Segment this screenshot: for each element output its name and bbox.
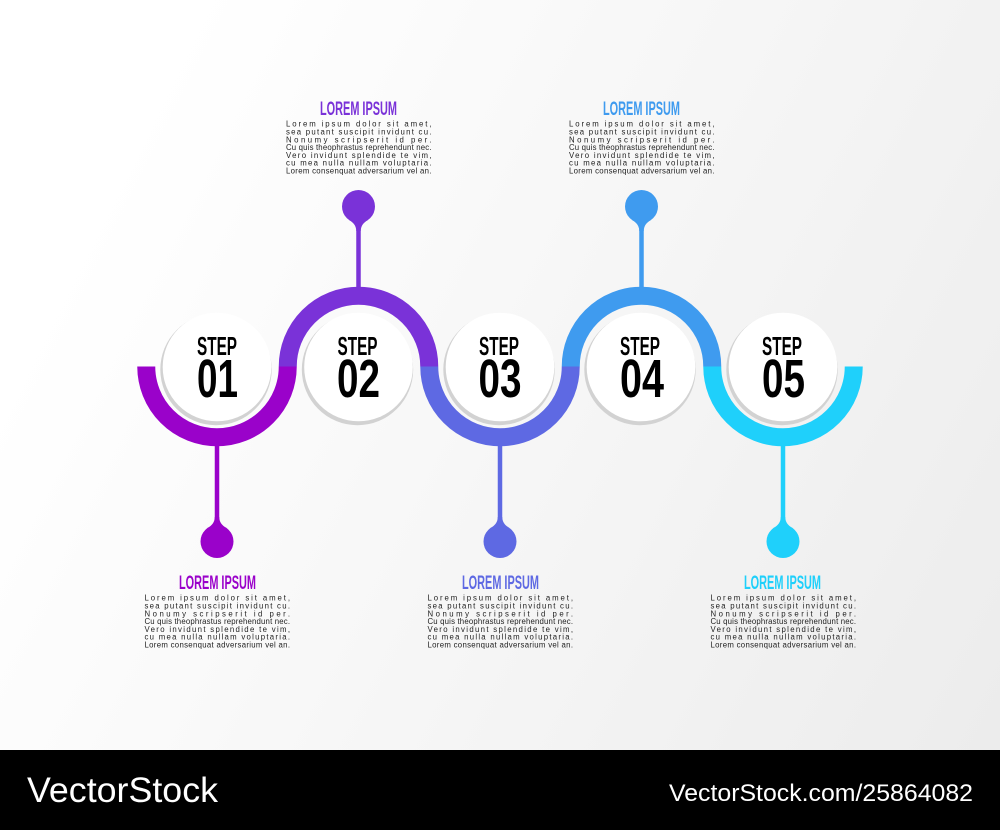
text block: step 5: Lorem ipsum dolor sit amet, — [710, 594, 856, 603]
text block: step 3: cu mea nulla nullam voluptaria. — [428, 633, 573, 642]
text block: step 4: Cu quis theophrastus reprehendunt nec. — [569, 143, 714, 152]
text block: step 5 — [710, 572, 856, 650]
text block: step 1: Vero invidunt splendide te vim, — [144, 625, 290, 634]
step 1 badge: STEP — [197, 331, 237, 361]
text block: step 1: Cu quis theophrastus reprehendunt nec. — [144, 617, 290, 626]
step 1 connector and pin — [200, 440, 234, 558]
watermark footer — [0, 750, 1000, 830]
text block: step 1: cu mea nulla nullam voluptaria. — [144, 633, 290, 642]
text block: step 5: sea putant suscipit invidunt cu. — [710, 602, 856, 610]
step 2 badge: 02 — [337, 349, 380, 409]
text block: step 3: sea putant suscipit invidunt cu. — [428, 602, 573, 610]
step 2 badge: STEP — [338, 331, 378, 361]
step 5 badge — [726, 313, 838, 425]
text block: step 5: LOREM IPSUM — [744, 572, 821, 594]
text block: step 4: sea putant suscipit invidunt cu. — [569, 128, 714, 136]
text block: step 5: Cu quis theophrastus reprehendunt nec. — [710, 617, 856, 626]
step 5 badge: 05 — [762, 349, 805, 409]
text block: step 5: cu mea nulla nullam voluptaria. — [710, 633, 856, 642]
step 4 badge: 04 — [620, 349, 664, 409]
text block: step 4: Lorem consenquat adversarium vel an. — [569, 166, 714, 176]
text block: step 4: LOREM IPSUM — [603, 98, 680, 120]
watermark footer: VectorStock.com/25864082 — [669, 780, 973, 807]
step 4 badge: STEP — [620, 331, 660, 361]
text block: step 5: Lorem consenquat adversarium vel an. — [710, 640, 856, 650]
step 3 connector and pin — [484, 440, 516, 558]
text block: step 1 — [144, 572, 290, 650]
text block: step 3: Cu quis theophrastus reprehendunt nec. — [428, 617, 573, 626]
text block: step 2 — [286, 98, 432, 176]
text block: step 2: Nonumy scripserit id per. — [286, 135, 432, 144]
text block: step 2: cu mea nulla nullam voluptaria. — [286, 159, 432, 168]
text block: step 4: Nonumy scripserit id per. — [569, 135, 714, 144]
step 2 connector and pin — [342, 190, 375, 292]
step 5 connector and pin — [766, 440, 800, 558]
text block: step 5: Nonumy scripserit id per. — [710, 609, 856, 618]
step 4 badge — [584, 313, 696, 425]
text block: step 2: Lorem ipsum dolor sit amet, — [286, 120, 432, 129]
text block: step 5: Vero invidunt splendide te vim, — [710, 625, 856, 634]
text block: step 1: Lorem consenquat adversarium vel an. — [144, 640, 290, 650]
step 3 badge: STEP — [479, 331, 519, 361]
text block: step 1: Lorem ipsum dolor sit amet, — [144, 594, 290, 603]
text block: step 1: Nonumy scripserit id per. — [144, 609, 290, 618]
step 1 badge: 01 — [197, 349, 238, 409]
text block: step 4: Vero invidunt splendide te vim, — [569, 151, 714, 160]
watermark footer: VectorStock — [27, 771, 219, 810]
step 4 connector and pin — [625, 190, 658, 292]
step 5 badge: STEP — [762, 331, 802, 361]
text block: step 3: Lorem consenquat adversarium vel an. — [428, 640, 573, 650]
text block: step 2: sea putant suscipit invidunt cu. — [286, 128, 432, 136]
text block: step 2: Cu quis theophrastus reprehendunt nec. — [286, 143, 432, 152]
text block: step 3 — [428, 572, 573, 650]
text block: step 3: Nonumy scripserit id per. — [428, 609, 573, 618]
step 1 badge — [160, 313, 272, 425]
wave arcs — [146, 296, 854, 437]
text block: step 3: Lorem ipsum dolor sit amet, — [428, 594, 573, 603]
text block: step 4: cu mea nulla nullam voluptaria. — [569, 159, 714, 168]
text block: step 4 — [569, 98, 714, 176]
step 3 badge: 03 — [478, 349, 522, 409]
text block: step 2: LOREM IPSUM — [320, 98, 397, 120]
text block: step 1: sea putant suscipit invidunt cu. — [144, 602, 290, 610]
text block: step 4: Lorem ipsum dolor sit amet, — [569, 120, 714, 129]
step 3 badge — [443, 313, 555, 425]
text block: step 2: Lorem consenquat adversarium vel an. — [286, 166, 432, 176]
text block: step 3: LOREM IPSUM — [462, 572, 539, 594]
text block: step 2: Vero invidunt splendide te vim, — [286, 151, 432, 160]
step 2 badge — [302, 313, 413, 425]
text block: step 3: Vero invidunt splendide te vim, — [428, 625, 573, 634]
text block: step 1: LOREM IPSUM — [179, 572, 256, 594]
